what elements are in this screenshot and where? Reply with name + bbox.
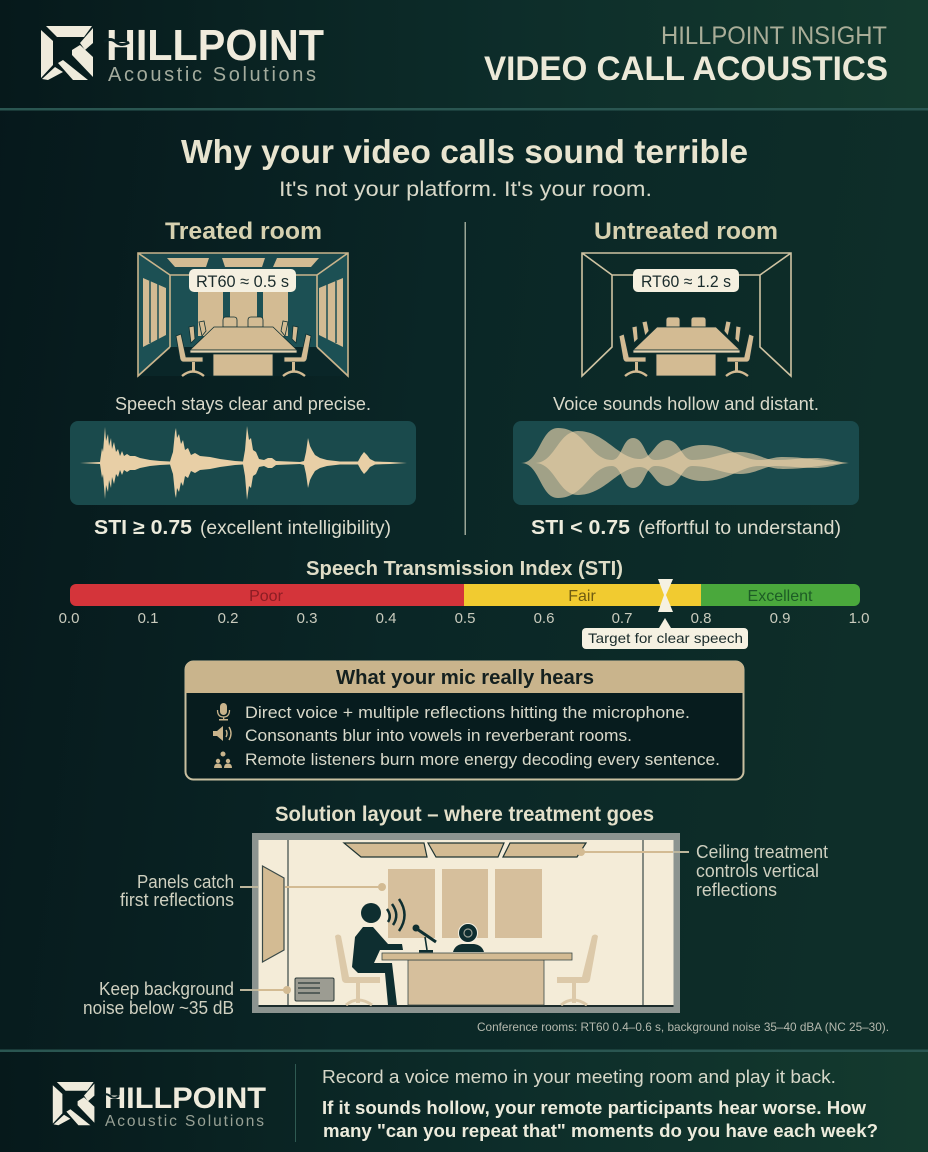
header title: VIDEO CALL ACOUSTICS: [484, 50, 888, 88]
footer question: If it sounds hollow, your remote participants hear worse. How: [322, 1098, 867, 1118]
room cross-section diagram: [252, 833, 680, 1013]
list item 3: Remote listeners burn more energy decoding every sentence.: [245, 750, 720, 769]
side wall panel: [262, 866, 284, 962]
footer band: [0, 1050, 928, 1152]
footer logo wordmark: HILLPOINT: [104, 1082, 266, 1115]
header logo wordmark: HILLPOINT: [106, 21, 324, 70]
callout: ceiling: Ceiling treatment: [696, 842, 828, 862]
STI tick labels: [59, 610, 869, 627]
treated caption: Speech stays clear and precise.: [115, 393, 371, 414]
list item 2: Consonants blur into vowels in reverberant rooms.: [245, 726, 632, 745]
treated STI result: (excellent intelligibility): [200, 518, 391, 539]
STI scale: [59, 558, 869, 649]
untreated waveform: [513, 421, 859, 505]
callout: ceiling: [696, 842, 828, 900]
callout: panels: Panels catch: [137, 872, 234, 892]
STI colour bar: Fair: [568, 588, 596, 605]
leader dots inside: [258, 848, 673, 994]
footer question: [322, 1098, 878, 1141]
panel: untreated room: [513, 218, 859, 539]
untreated caption: Voice sounds hollow and distant.: [553, 393, 819, 414]
icon: speaker: [213, 726, 231, 741]
footer logo icon: [53, 1082, 94, 1125]
header eyebrow: HILLPOINT INSIGHT: [661, 22, 887, 50]
untreated STI result: STI < 0.75: [531, 517, 630, 539]
untreated room illustration: [582, 253, 791, 376]
callout: panels: [120, 872, 234, 910]
microphone: [412, 924, 436, 952]
right chair: [557, 934, 598, 1005]
header logo wave accent: [104, 40, 129, 44]
noise unit: [295, 978, 334, 1001]
icon: sound waves: [387, 899, 404, 931]
STI tick labels: 0.0: [59, 610, 79, 627]
treated room heading: Treated room: [165, 218, 322, 245]
panel: treated room: [70, 218, 416, 539]
STI tick labels: 0.4: [376, 610, 396, 627]
person speaking: [352, 903, 403, 1005]
footer divider: [295, 1064, 296, 1142]
wall panels: [388, 869, 542, 938]
STI tick labels: 0.8: [691, 610, 711, 627]
treated waveform: [70, 421, 416, 505]
STI tick labels: 0.3: [297, 610, 317, 627]
STI scale title: Speech Transmission Index (STI): [306, 558, 623, 580]
list item 1: Direct voice + multiple reflections hitting the microphone.: [245, 703, 690, 722]
STI tick labels: 0.9: [770, 610, 790, 627]
untreated STI result: [531, 517, 841, 539]
STI colour bar: Excellent: [748, 588, 813, 605]
STI colour bar: [70, 584, 860, 606]
target callout: Target for clear speech: [588, 630, 743, 646]
left chair: [335, 934, 380, 1005]
solution layout heading: Solution layout – where treatment goes: [275, 803, 654, 826]
RT60 badge treated: RT60 ≈ 0.5 s: [196, 272, 289, 291]
panel: what your mic really hears: [185, 661, 744, 780]
treated STI result: STI ≥ 0.75: [94, 517, 192, 539]
table: [382, 953, 572, 1005]
header band: [0, 0, 928, 110]
footer prompt: Record a voice memo in your meeting room and play it back.: [322, 1067, 836, 1087]
treated STI result: [94, 517, 391, 539]
target marker: [658, 579, 673, 612]
target callout: [582, 618, 748, 649]
source note: Conference rooms: RT60 0.4–0.6 s, background noise 35–40 dBA (NC 25–30).: [477, 1020, 889, 1034]
STI tick labels: 0.2: [218, 610, 238, 627]
footer logo wave accent: [102, 1094, 119, 1098]
main title: Why your video calls sound terrible: [181, 133, 748, 170]
footer question: many "can you repeat that" moments do you have each week?: [323, 1121, 878, 1141]
leader lines outside: [240, 852, 689, 990]
STI tick labels: 0.6: [534, 610, 554, 627]
STI colour bar: Poor: [249, 588, 284, 605]
subtitle: It's not your platform. It's your room.: [279, 178, 652, 201]
STI tick labels: 0.5: [455, 610, 475, 627]
untreated STI result: (effortful to understand): [638, 518, 841, 539]
callout: background noise: noise below ~35 dB: [83, 998, 234, 1018]
callout: ceiling: controls vertical: [696, 861, 819, 881]
untreated room heading: Untreated room: [594, 218, 778, 245]
icon: listeners: [214, 752, 232, 768]
webcam: [453, 924, 484, 952]
callout: panels: first reflections: [120, 890, 234, 910]
callout: ceiling: reflections: [696, 880, 777, 900]
divider between rooms: [464, 222, 466, 535]
panel header: [185, 661, 744, 693]
header logo icon: [41, 26, 93, 80]
STI tick labels: 0.7: [612, 610, 632, 627]
treated room illustration: [138, 253, 348, 376]
icon: microphone: [218, 703, 230, 720]
callout: background noise: [83, 979, 234, 1018]
header logo tagline: Acoustic Solutions: [108, 64, 316, 86]
callout: background noise: Keep background: [99, 979, 234, 999]
STI tick labels: 0.1: [138, 610, 158, 627]
footer logo tagline: Acoustic Solutions: [105, 1113, 264, 1130]
ceiling panels: [344, 843, 586, 857]
RT60 badge untreated: RT60 ≈ 1.2 s: [641, 272, 731, 291]
panel header: What your mic really hears: [336, 667, 594, 689]
STI tick labels: 1.0: [849, 610, 869, 627]
